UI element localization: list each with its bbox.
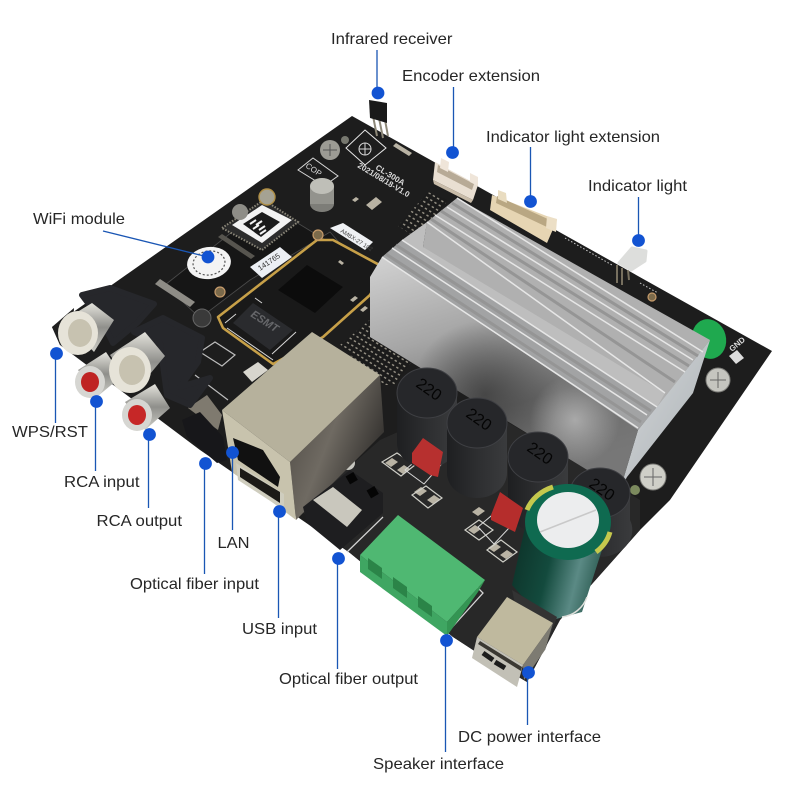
callout: Indicator light: Indicator light [588, 178, 688, 195]
callout: Encoder extension: Encoder extension [402, 68, 540, 85]
SMD dense area upper [398, 192, 448, 240]
white label left [250, 247, 292, 278]
fin highlights [382, 198, 703, 428]
LAN port opening [233, 438, 280, 487]
callout: Indicator light [588, 178, 688, 247]
infrared receiver part [369, 100, 388, 138]
ribbon connectors [155, 234, 255, 307]
RCA housing front [134, 318, 210, 405]
RJ45 side [290, 375, 384, 520]
callout: RCA input [64, 395, 140, 491]
SMD dense area beside jack [340, 318, 420, 385]
large capacitor [512, 484, 611, 622]
RCA red jack lower [122, 384, 170, 431]
RCA white jack front [109, 332, 165, 393]
callout: Optical fiber input: Optical fiber input [130, 576, 260, 593]
capacitor pad clusters [385, 458, 513, 559]
wide channel highlight [402, 222, 665, 407]
callout: Encoder extension [402, 68, 540, 159]
panel: RCA jacks [52, 288, 210, 431]
callout: USB input: USB input [242, 621, 318, 638]
RCA red jack upper [75, 352, 122, 398]
panel: circuit board [52, 116, 772, 682]
gold shielded area [218, 240, 385, 364]
RCA housing back [82, 288, 154, 343]
callout: RCA output: RCA output [96, 513, 183, 530]
WiFi module chip [222, 200, 298, 250]
red capacitor silk frames [405, 440, 524, 544]
edge dotted silkscreen [565, 238, 658, 293]
indicator light extension connector [490, 190, 557, 243]
callout: WiFi module: WiFi module [33, 211, 125, 228]
inductor 1 [397, 368, 457, 468]
heat sink front plate [370, 257, 638, 490]
green sticker [687, 315, 731, 363]
inductor 2: 220 [463, 405, 494, 435]
callout: RCA input: RCA input [64, 474, 140, 491]
callout: WiFi module [33, 211, 214, 263]
inductor 3 [508, 432, 568, 532]
fin shadows [386, 203, 698, 422]
callout: DC power interface: DC power interface [458, 729, 601, 746]
memory chip ESMT [233, 303, 293, 350]
callout: RCA output [96, 428, 183, 530]
left edge tab [52, 308, 74, 345]
plate dark reflection [370, 257, 638, 490]
rear fin block [423, 198, 710, 407]
pad outlines [382, 453, 517, 562]
callout: Optical fiber input [130, 457, 260, 593]
plate light reflection [370, 257, 638, 490]
inductor 1: 220 [413, 375, 444, 405]
callout: Infrared receiver: Infrared receiver [331, 31, 453, 48]
callout: Optical fiber output: Optical fiber output [279, 671, 419, 688]
crosshair mark [346, 130, 386, 165]
WiFi sub-panel outline [165, 205, 350, 318]
inductor 2 [447, 398, 507, 498]
panel: RJ45 LAN jack [222, 332, 384, 520]
memory chip ESMT: ESMT [248, 308, 282, 336]
small electrolytic capacitor [310, 178, 334, 212]
callout: LAN: LAN [218, 535, 250, 552]
COP silkscreen box [298, 158, 338, 186]
main processor chip [278, 265, 343, 313]
DC power connector [472, 590, 557, 687]
callout: USB input [242, 505, 318, 638]
RJ45 top [222, 332, 380, 462]
callout: Speaker interface: Speaker interface [373, 756, 504, 773]
optical input connector [182, 395, 227, 463]
optical output connector [303, 470, 383, 550]
callout: LAN [218, 446, 250, 552]
USB port [236, 463, 284, 510]
callout: Optical fiber output [279, 552, 419, 688]
SMD component clusters [338, 143, 412, 312]
white label left: 141765 [256, 251, 282, 273]
silkscreen model text: 2021/08/18-V1.0 [356, 161, 412, 199]
small connector near jack [243, 362, 268, 382]
GND marking: GND [728, 335, 747, 354]
RJ45 front [222, 410, 296, 520]
silk outlines near jacks [195, 342, 235, 400]
COP silkscreen box: COP [304, 161, 323, 178]
GND marking [728, 335, 747, 364]
callout: WPS/RST [12, 347, 88, 441]
silk lines near terminal [347, 517, 483, 633]
WiFi round sticker [185, 244, 233, 282]
board outline [52, 116, 772, 682]
RCA white jack back [58, 303, 114, 355]
panel: heat sink [370, 198, 710, 490]
red capacitors [412, 438, 523, 532]
lighter lower board area [300, 400, 640, 682]
encoder extension connector [433, 158, 478, 203]
callout: Indicator light extension [486, 129, 660, 208]
inductor 3: 220 [524, 439, 555, 469]
callout: Infrared receiver [331, 31, 453, 99]
mounting screws and pads [193, 136, 730, 495]
heat sink right face [620, 340, 710, 490]
callout: Indicator light extension: Indicator light extension [486, 129, 660, 146]
silkscreen model text: CL-300A [374, 163, 407, 188]
indicator light LED [617, 248, 646, 285]
white label right [330, 223, 374, 253]
silkscreen brackets around memory [225, 298, 296, 360]
inductor 4 [570, 468, 632, 557]
heat sink top [382, 240, 657, 430]
inductor 4: 220 [586, 475, 617, 505]
callout: Speaker interface [373, 634, 504, 773]
callout: DC power interface [458, 666, 601, 746]
white label right: AM8X-27 102 [339, 229, 374, 253]
callout: WPS/RST: WPS/RST [12, 424, 88, 441]
speaker terminal [360, 515, 485, 636]
